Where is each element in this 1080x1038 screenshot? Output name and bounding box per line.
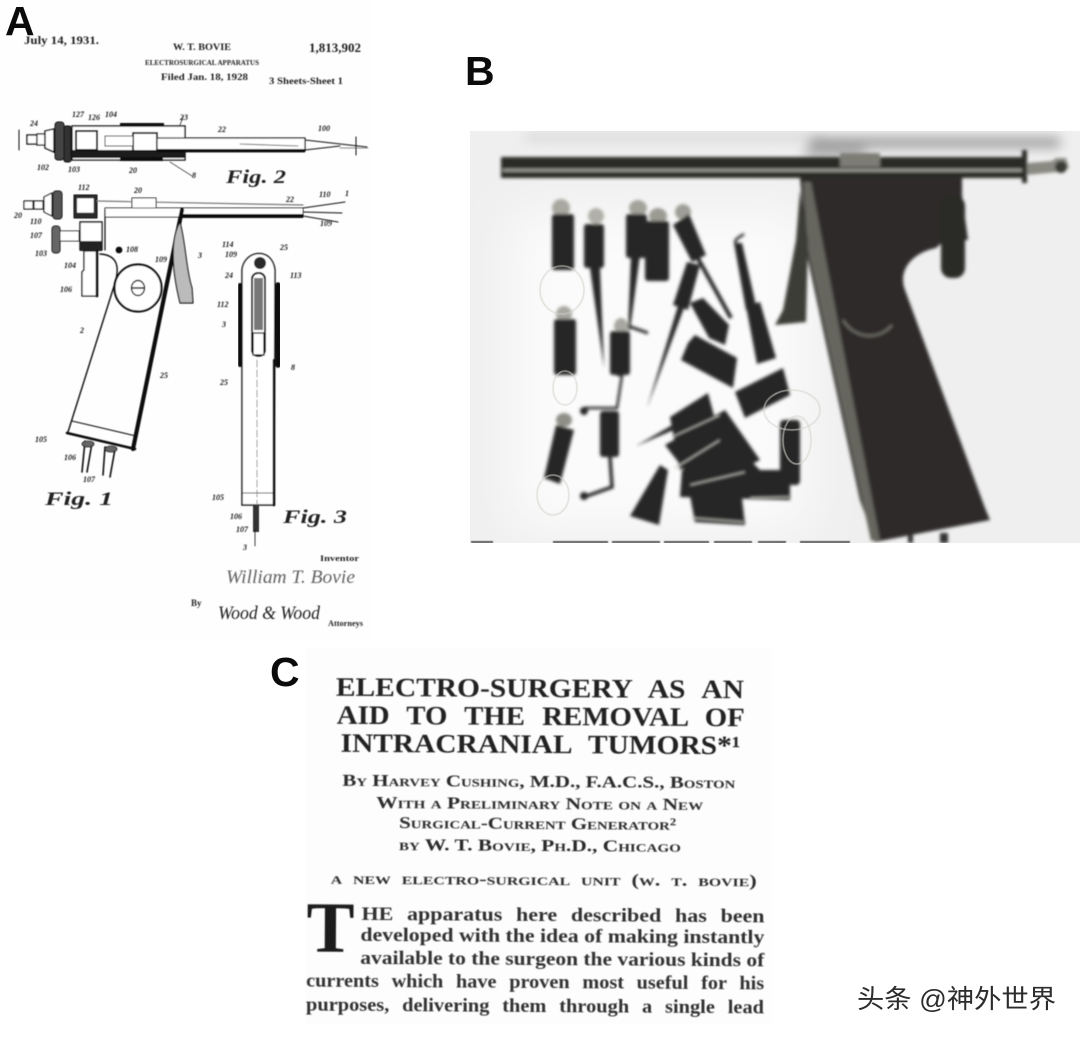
patent header text: Filed Jan. 18, 1928 xyxy=(161,72,249,82)
body paragraph: developed with the idea of making instantly xyxy=(360,926,765,948)
patent header text: July 14, 1931. xyxy=(24,33,99,47)
panel A: patent drawing xyxy=(0,0,372,640)
section heading: a new electro-surgical unit (w. t. bovie) xyxy=(331,869,757,890)
part numbers: 108 xyxy=(126,245,138,254)
byline: Surgical-Current Generator² xyxy=(399,813,676,834)
part numbers: 103 xyxy=(35,249,47,258)
part numbers: 127 xyxy=(72,110,85,119)
figure captions and signatures: By xyxy=(191,598,202,608)
part numbers: 110 xyxy=(30,217,42,226)
cut-off caption xyxy=(471,541,850,543)
part numbers: 126 xyxy=(88,113,100,122)
wire loops xyxy=(537,266,820,515)
highlights on electrodes xyxy=(672,415,790,522)
part numbers: 104 xyxy=(105,110,117,119)
part numbers: 107 xyxy=(236,525,249,534)
figure captions and signatures: Fig. 2 xyxy=(225,167,287,188)
patent header text: 1,813,902 xyxy=(309,41,361,55)
part numbers: 8 xyxy=(291,363,295,372)
part numbers: 25 xyxy=(159,371,168,380)
article title: ELECTRO-SURGERY AS AN xyxy=(336,673,744,704)
panel label B: B xyxy=(465,48,495,94)
body paragraph: purposes, delivering them through a single lead xyxy=(306,996,765,1018)
article title xyxy=(335,673,745,760)
part numbers: 3 xyxy=(221,320,226,329)
figure captions and signatures: Fig. 3 xyxy=(282,507,347,528)
drawing: figure 1 side view with grip xyxy=(24,191,345,477)
body paragraph: available to the surgeon the various kinds of xyxy=(360,949,765,971)
patent header text: ELECTROSURGICAL APPARATUS xyxy=(145,59,259,67)
part numbers xyxy=(13,110,349,552)
part numbers: 100 xyxy=(318,124,330,133)
part numbers: 24 xyxy=(29,119,38,128)
article title: AID TO THE REMOVAL OF xyxy=(337,701,745,732)
figure captions and signatures: Inventor xyxy=(320,553,359,563)
part numbers: 22 xyxy=(285,195,294,204)
figure captions and signatures: Wood & Wood xyxy=(218,603,320,624)
photo smudge at top edge xyxy=(525,135,1060,158)
part numbers: 20 xyxy=(13,211,22,220)
part numbers: 109 xyxy=(155,255,167,264)
part numbers: 110 xyxy=(319,190,331,199)
part numbers: 20 xyxy=(128,166,137,175)
part numbers: 113 xyxy=(290,271,302,280)
paper background xyxy=(305,648,772,1024)
part numbers: 109 xyxy=(225,250,237,259)
panel C: journal article excerpt xyxy=(305,648,772,1024)
part numbers: 105 xyxy=(35,435,47,444)
part numbers: 106 xyxy=(230,512,242,521)
byline xyxy=(342,771,736,856)
watermark: 头条 @神外世界 xyxy=(857,984,1056,1014)
panel label C: C xyxy=(270,649,300,695)
body paragraph: currents which have proven most useful for his xyxy=(306,972,764,994)
part numbers: 25 xyxy=(219,378,228,387)
part numbers: 105 xyxy=(212,493,224,502)
article text xyxy=(306,673,767,1018)
patent sheet xyxy=(0,0,372,640)
part numbers: 2 xyxy=(79,326,84,335)
part numbers: 104 xyxy=(64,261,76,270)
figure captions and signatures: Fig. 1 xyxy=(44,489,113,510)
drop cap: T xyxy=(306,888,355,968)
body paragraph: HE apparatus here described has been xyxy=(361,905,765,927)
part numbers: 107 xyxy=(83,475,96,484)
drawing: figure 2 side section xyxy=(19,117,368,176)
part numbers: 112 xyxy=(217,300,229,309)
part numbers: 107 xyxy=(30,231,43,240)
part numbers: 22 xyxy=(217,125,226,134)
instrument shaft and pistol handle xyxy=(501,150,1069,543)
part numbers: 106 xyxy=(64,453,76,462)
part numbers: 24 xyxy=(224,271,233,280)
part numbers: 103 xyxy=(68,165,80,174)
patent header text: W. T. BOVIE xyxy=(173,42,231,52)
part numbers: 102 xyxy=(37,163,49,172)
part numbers: 106 xyxy=(60,285,72,294)
patent header text: 3 Sheets-Sheet 1 xyxy=(269,76,344,86)
part numbers: 3 xyxy=(242,543,247,552)
figure captions and signatures xyxy=(44,167,363,628)
body paragraph xyxy=(306,905,766,1018)
drawing: figure 3 front view xyxy=(240,253,278,546)
part numbers: 112 xyxy=(78,183,90,192)
part numbers: 1 xyxy=(345,189,349,198)
panel B: photograph of the handle and electrodes xyxy=(470,131,1080,543)
part numbers: 8 xyxy=(192,171,196,180)
figure captions and signatures: William T. Bovie xyxy=(226,567,355,588)
part numbers: 3 xyxy=(197,251,202,260)
photo background xyxy=(470,131,1080,543)
figure captions and signatures: Attorneys xyxy=(328,619,363,628)
article title: INTRACRANIAL TUMORS*¹ xyxy=(340,729,741,760)
patent header text xyxy=(24,33,361,86)
part numbers: 109 xyxy=(320,219,332,228)
part numbers: 20 xyxy=(133,186,142,195)
part numbers: 23 xyxy=(179,113,188,122)
byline: by W. T. Bovie, Ph.D., Chicago xyxy=(399,835,681,856)
byline: By Harvey Cushing, M.D., F.A.C.S., Boston xyxy=(342,771,736,792)
part numbers: 114 xyxy=(222,240,234,249)
photo light shading xyxy=(522,221,797,519)
electrode attachments xyxy=(544,199,800,525)
part numbers: 25 xyxy=(279,243,288,252)
byline: With a Preliminary Note on a New xyxy=(376,793,703,814)
